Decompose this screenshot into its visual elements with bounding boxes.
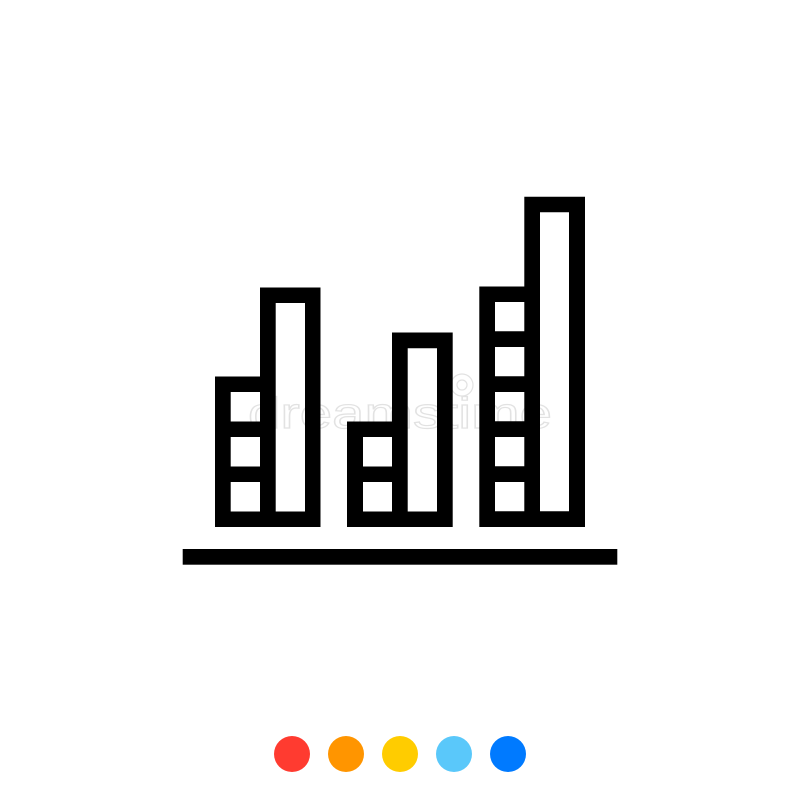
icon: bar chart bbox=[183, 197, 617, 565]
watermark: dreamstime bbox=[248, 389, 552, 438]
bar group 2 bbox=[347, 332, 453, 527]
swatch: blue bbox=[490, 736, 526, 772]
watermark bbox=[248, 374, 552, 438]
bar group 3 bbox=[479, 197, 585, 527]
colour swatches bbox=[274, 736, 526, 772]
swatch: red bbox=[274, 736, 310, 772]
chart baseline bbox=[183, 549, 617, 565]
swatch: yellow bbox=[382, 736, 418, 772]
bar group 1 bbox=[215, 288, 320, 527]
swatch: orange bbox=[328, 736, 364, 772]
swatch: light blue bbox=[436, 736, 472, 772]
